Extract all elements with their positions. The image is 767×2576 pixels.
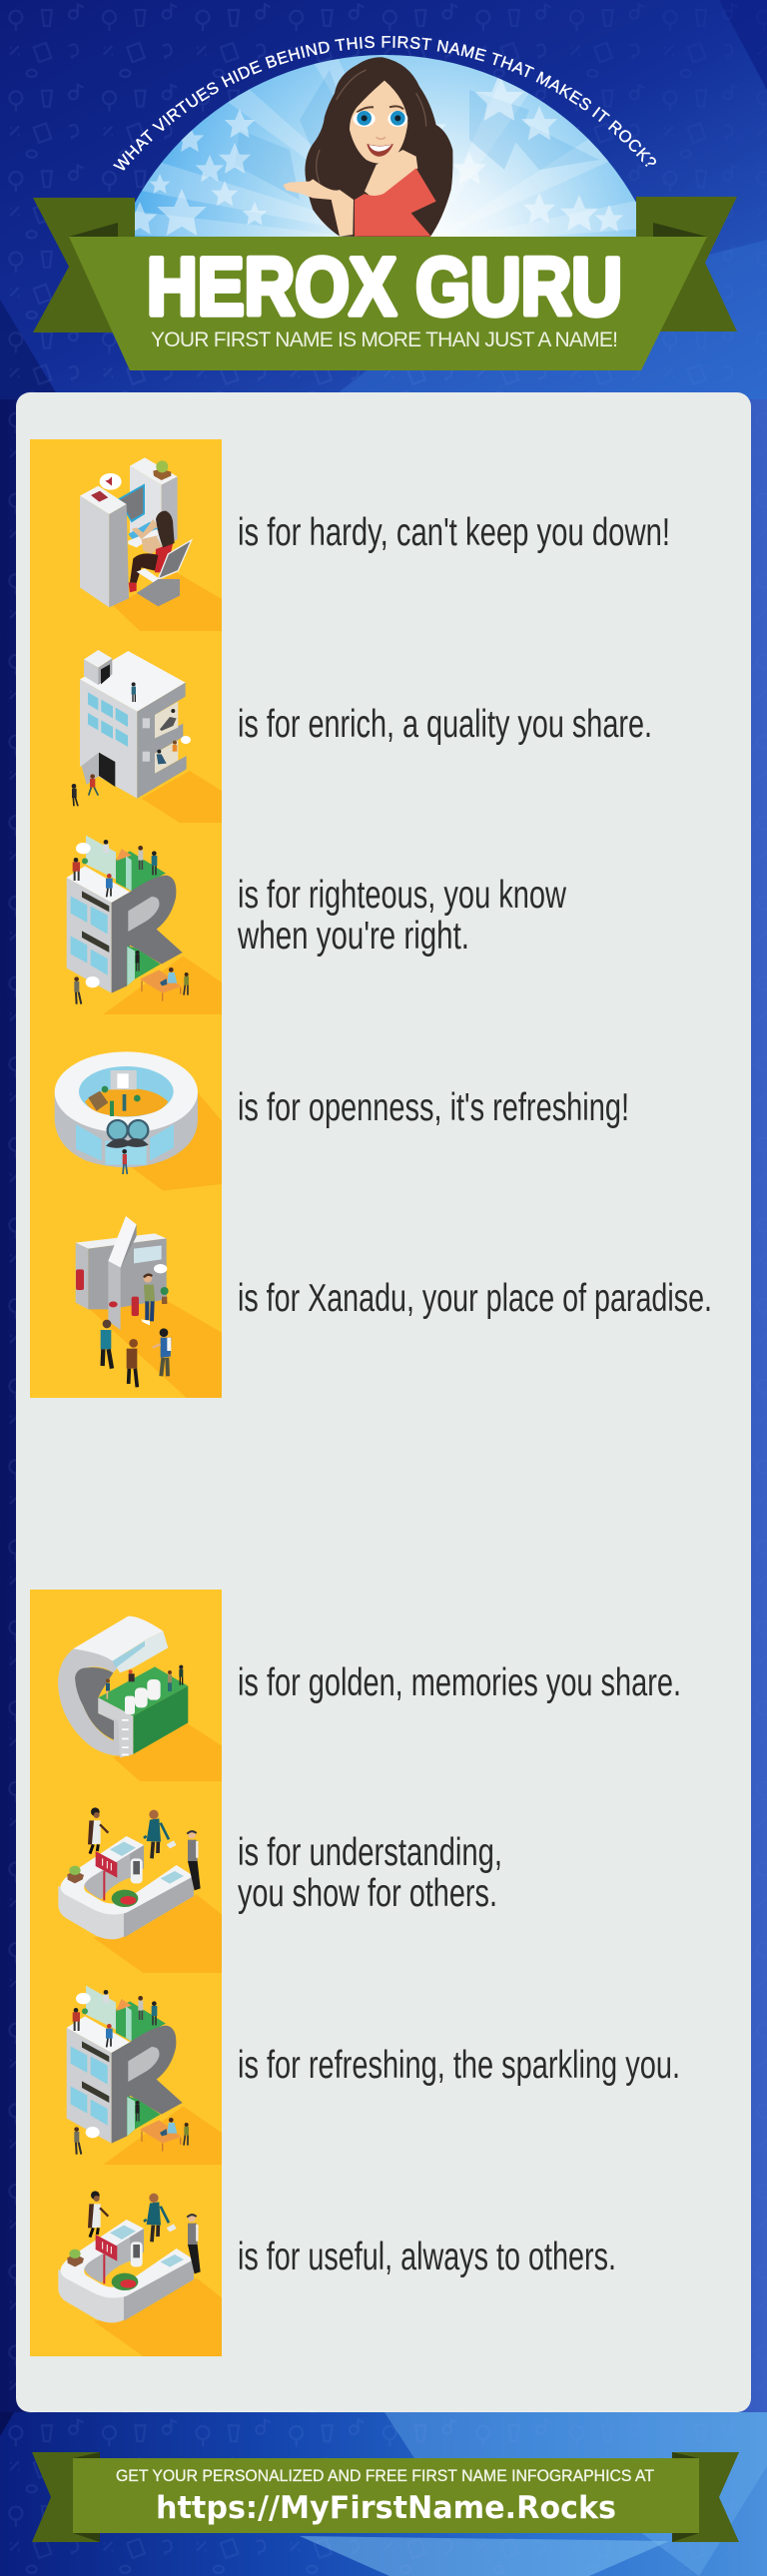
letter tile X	[76, 1216, 222, 1398]
letter tile E	[72, 650, 222, 823]
footer ribbon	[32, 2452, 739, 2542]
letter tile R repeat	[67, 1986, 222, 2165]
yellow column 2	[30, 1590, 222, 2356]
letter tile G	[58, 1616, 222, 1781]
letter tile U repeat	[58, 2191, 222, 2356]
title ribbon	[33, 197, 737, 370]
footer left tail	[32, 2452, 100, 2542]
subtitle: YOUR FIRST NAME IS MORE THAN JUST A NAME!	[151, 328, 618, 351]
line: U: you show for others.	[238, 1872, 497, 1915]
ribbon right tail	[636, 197, 737, 331]
line: R	[237, 874, 567, 958]
yellow column 1	[30, 439, 222, 1398]
footer text: GET YOUR PERSONALIZED AND FREE FIRST NAME INFOGRAPHICS AT	[116, 2466, 654, 2485]
title text: HEROX GURU	[147, 242, 622, 332]
ribbon front	[69, 237, 707, 370]
footer right tail	[672, 2452, 739, 2542]
line: U	[238, 1831, 502, 1915]
line: R: is for righteous, you know	[238, 874, 567, 917]
woman illustration	[283, 57, 452, 238]
curved tagline: WHAT VIRTUES HIDE BEHIND THIS FIRST NAME THAT MAKES IT ROCK?	[113, 36, 656, 171]
letter tile R	[67, 836, 222, 1014]
footer front	[73, 2458, 699, 2533]
line: O: is for openness, it's refreshing!	[238, 1086, 629, 1129]
letter tile U	[58, 1807, 222, 1973]
ribbon left tail	[33, 198, 135, 332]
line: U second: is for useful, always to others.	[238, 2236, 616, 2278]
footer url: https://MyFirstName.Rocks	[156, 2490, 616, 2526]
line: R: when you're right.	[237, 915, 469, 958]
header sunburst dome with stars and woman	[135, 55, 636, 237]
letter tile H	[80, 457, 222, 631]
letter tile O	[55, 1051, 222, 1191]
main panel	[16, 392, 751, 2412]
line: U: is for understanding,	[238, 1831, 502, 1874]
